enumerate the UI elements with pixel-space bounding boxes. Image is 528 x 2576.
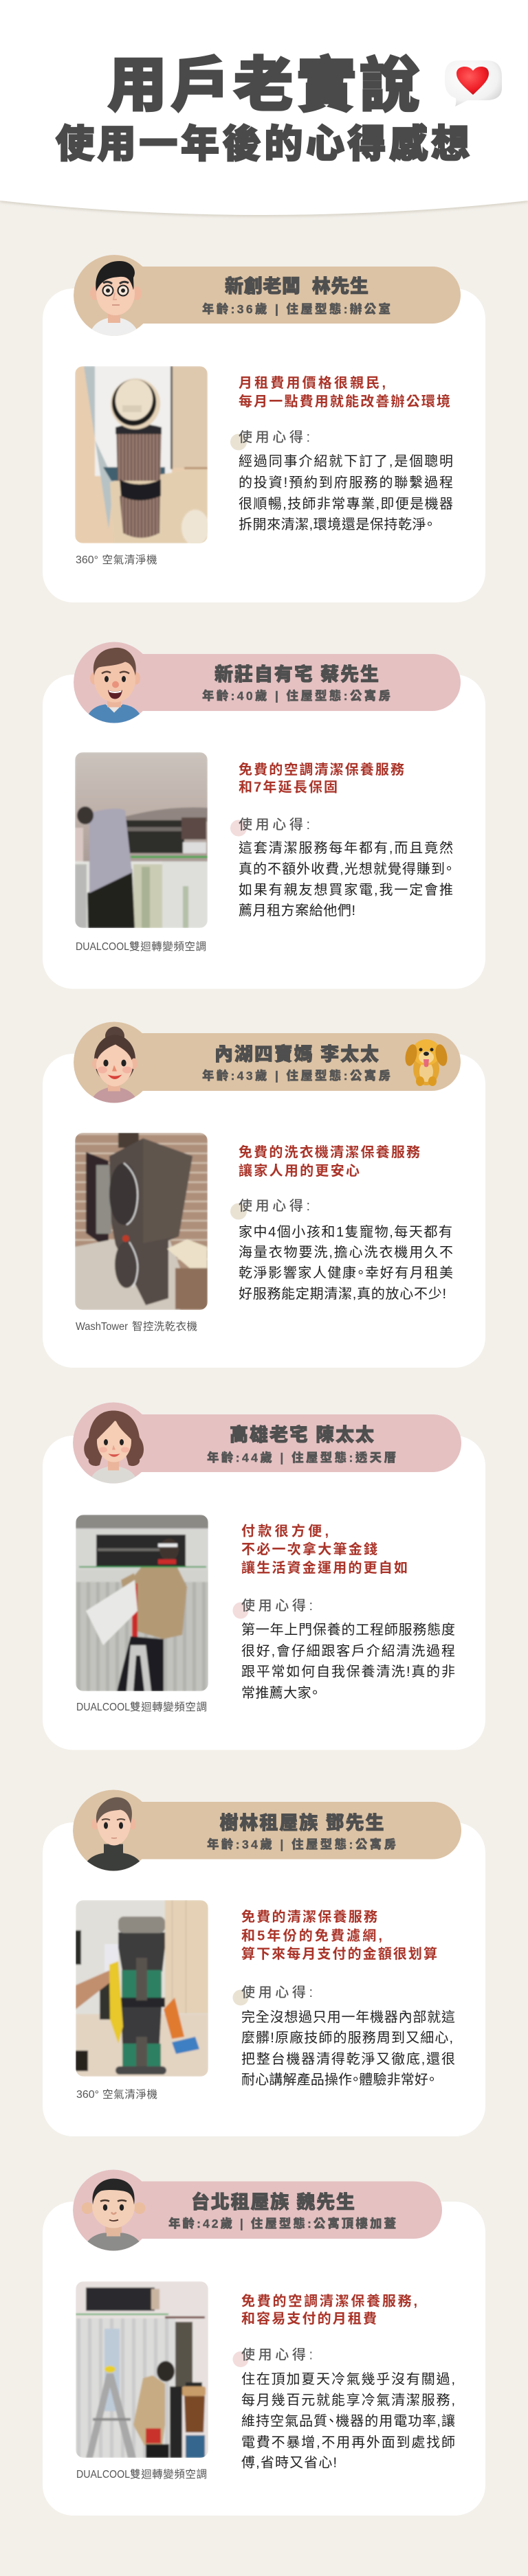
product caption (76, 940, 206, 953)
title (56, 52, 470, 166)
review body: 的投資!預約到府服務的聯繫過程 (239, 475, 453, 490)
name banner (113, 1414, 461, 1472)
title: 使用一年後的心得感想 (56, 122, 470, 166)
review body: 傅,省時又省心! (241, 2455, 337, 2470)
avatar: man in grey tee (73, 2169, 146, 2250)
card background (43, 1436, 485, 1750)
review body: 如果有親友想買家電,我一定會推 (239, 882, 453, 898)
photo: air purifier (75, 366, 209, 545)
photo: technician servicing air conditioner (76, 1515, 208, 1691)
product caption: 雙迴轉變頻空調 (130, 1701, 207, 1713)
avatar: man in black turtleneck (73, 1790, 142, 1871)
name banner: 年齡:44歲 | 住屋型態:透天厝 (207, 1451, 396, 1465)
avatar: woman with hair bun (74, 1022, 143, 1103)
product caption: DUALCOOL (76, 1702, 130, 1713)
review body: 跟平常如何自我保養清洗!真的非 (241, 1664, 455, 1680)
name banner: 年齡:43歲 | 住屋型態:公寓房 (202, 1069, 390, 1083)
highlight headline (239, 761, 404, 795)
highlight headline: 讓生活資金運用的更自如 (241, 1559, 408, 1576)
review body: 很順暢,技師非常專業,即便是機器 (239, 496, 453, 512)
highlight headline: 每月一點費用就能改善辦公環境 (239, 393, 450, 409)
review body: 真的不額外收費,光想就覺得賺到。 (239, 861, 452, 877)
review label: 使用心得: (241, 2347, 313, 2363)
name banner: 年齡:34歲 | 住屋型態:公寓房 (207, 1838, 396, 1851)
product caption: DUALCOOL (76, 2469, 130, 2481)
review label dot (230, 820, 247, 837)
name banner: 年齡:36歲 | 住屋型態:辦公室 (202, 302, 390, 316)
highlight headline: 和5年份的免費濾網, (241, 1928, 382, 1944)
product caption: 360° (76, 2089, 99, 2101)
card background (43, 1822, 485, 2136)
review body: 好服務能定期清潔,真的放心不少! (239, 1286, 446, 1302)
product caption (76, 1320, 197, 1333)
review body: 薦月租方案給他們! (239, 903, 355, 918)
review body: 家中4個小孩和1隻寵物,每天都有 (239, 1224, 452, 1240)
review label: 使用心得: (239, 429, 310, 445)
product caption: 雙迴轉變頻空調 (129, 940, 206, 953)
review body: 拆開來清潔,環境還是保持乾淨。 (239, 517, 433, 532)
name banner: 新莊自有宅 蔡先生 (214, 664, 379, 685)
highlight headline: 不必一次拿大筆金錢 (241, 1541, 377, 1557)
name banner (114, 654, 461, 711)
highlight headline: 月租費用價格很親民, (239, 375, 386, 391)
review body: 海量衣物要洗,擔心洗衣機用久不 (239, 1245, 453, 1260)
review body: 第一年上門保養的工程師服務態度 (241, 1622, 455, 1638)
review body: 完全沒想過只用一年機器內部就這 (241, 2009, 455, 2025)
photo: air conditioner cleaning (75, 752, 208, 928)
product caption (76, 2468, 207, 2481)
name banner: 新創老闆 林先生 (225, 275, 368, 297)
panel: 陳太太 testimonial (43, 1403, 485, 1750)
card background (43, 1054, 485, 1368)
review label dot (232, 1989, 249, 2006)
review label: 使用心得: (239, 817, 310, 833)
review body: 乾淨影響家人健康。幸好有月租美 (239, 1265, 453, 1280)
name banner: 年齡:42歲 | 住屋型態:公寓頂樓加蓋 (168, 2217, 396, 2230)
name banner (114, 1033, 461, 1091)
product caption: 空氣清淨機 (102, 2088, 157, 2101)
review body: 經過同事介紹就下訂了,是個聰明 (239, 453, 453, 469)
highlight headline: 算下來每月支付的金額很划算 (241, 1945, 437, 1962)
panel: 蔡先生 testimonial (43, 642, 485, 989)
name banner (113, 2182, 442, 2239)
avatar: man with glasses (74, 255, 143, 336)
panel: 鄧先生 testimonial (43, 1790, 485, 2136)
panel: 李太太 testimonial (43, 1022, 485, 1368)
name banner (113, 1802, 461, 1859)
product caption: WashTower (76, 1321, 128, 1333)
review body (239, 840, 453, 918)
avatar: woman with wavy hair (73, 1403, 144, 1484)
title: 用戶老實說 (107, 52, 419, 119)
photo: technician beside ladder and fan (76, 2281, 208, 2458)
highlight headline (239, 375, 450, 409)
highlight headline: 和7年延長保固 (239, 779, 338, 795)
name banner: 年齡:40歲 | 住屋型態:公寓房 (202, 689, 390, 703)
highlight headline (241, 1522, 408, 1576)
review body: 常推薦大家。 (241, 1685, 318, 1701)
review label: 使用心得: (239, 1198, 310, 1214)
review body: 電費不暴增,不用再外面到處找師 (241, 2434, 455, 2450)
highlight headline (241, 2293, 417, 2327)
card background (43, 289, 485, 602)
product caption: 360° (76, 554, 98, 566)
review body: 這套清潔服務每年都有,而且竟然 (239, 840, 453, 856)
name banner: 樹林租屋族 鄧先生 (220, 1812, 384, 1833)
panel: 魏先生 testimonial (43, 2169, 485, 2516)
highlight headline: 免費的空調清潔保養服務, (241, 2293, 417, 2309)
panel: 林先生 testimonial (43, 255, 485, 602)
review body (241, 2371, 455, 2470)
review label: 使用心得: (241, 1598, 313, 1614)
review body (239, 1224, 453, 1302)
review body: 住在頂加夏天冷氣幾乎沒有關過, (241, 2371, 455, 2387)
card background (43, 2202, 485, 2516)
product caption (76, 1701, 207, 1713)
product caption (76, 554, 157, 566)
review label dot (230, 434, 247, 451)
card background (43, 675, 485, 989)
review body: 把整台機器清得乾淨又徹底,還很 (241, 2051, 455, 2067)
product caption: 空氣清淨機 (102, 554, 157, 566)
product caption: 雙迴轉變頻空調 (130, 2468, 207, 2481)
highlight headline: 付款很方便, (241, 1522, 329, 1539)
highlight headline: 免費的洗衣機清潔保養服務 (239, 1144, 420, 1160)
review body (241, 1622, 455, 1701)
icon: golden dog (404, 1039, 449, 1086)
highlight headline: 免費的空調清潔保養服務 (239, 761, 404, 778)
review body: 每月幾百元就能享冷氣清潔服務, (241, 2392, 455, 2408)
review body (239, 453, 453, 532)
review label dot (230, 1204, 247, 1220)
review label dot (232, 1602, 249, 1618)
review body (241, 2009, 455, 2088)
product caption: 智控洗乾衣機 (132, 1320, 197, 1333)
review label: 使用心得: (241, 1985, 313, 2000)
review label dot (232, 2351, 249, 2367)
avatar: smiling man in blue (74, 642, 143, 723)
photo: purifier cleaning (76, 1900, 208, 2077)
header white curved band (0, 0, 528, 215)
review body: 耐心講解產品操作。體驗非常好。 (241, 2072, 435, 2088)
name banner: 高雄老宅 陳太太 (230, 1424, 374, 1445)
review body: 麼髒!原廠技師的服務周到又細心, (241, 2029, 453, 2046)
highlight headline: 讓家人用的更安心 (239, 1162, 360, 1179)
review body: 維持空氣品質、機器的用電功率,讓 (241, 2413, 455, 2429)
review body: 很好,會仔細跟客戶介紹清洗過程 (241, 1643, 455, 1659)
photo: washtower (75, 1133, 208, 1310)
icon: heart speech bubble (445, 60, 502, 106)
highlight headline: 和容易支付的月租費 (241, 2310, 377, 2327)
highlight headline (241, 1909, 437, 1962)
name banner: 台北租屋族 魏先生 (191, 2191, 355, 2213)
product caption: DUALCOOL (76, 941, 129, 953)
product caption (76, 2088, 157, 2101)
highlight headline: 免費的清潔保養服務 (241, 1909, 377, 1925)
name banner: 內湖四寶媽 李太太 (214, 1043, 379, 1065)
highlight headline (239, 1144, 420, 1179)
name banner (114, 267, 461, 324)
